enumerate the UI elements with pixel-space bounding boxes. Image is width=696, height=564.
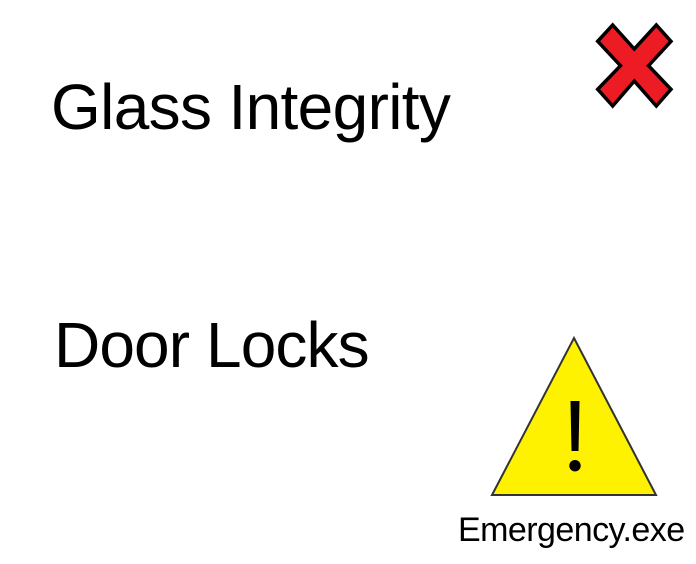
icon: red X: [595, 22, 674, 109]
label: Emergency.exe: Emergency.exe: [458, 511, 685, 549]
heading: Glass Integrity: Glass Integrity: [51, 71, 450, 143]
heading: Door Locks: Door Locks: [54, 309, 369, 381]
icon: warning triangle: [490, 336, 658, 496]
